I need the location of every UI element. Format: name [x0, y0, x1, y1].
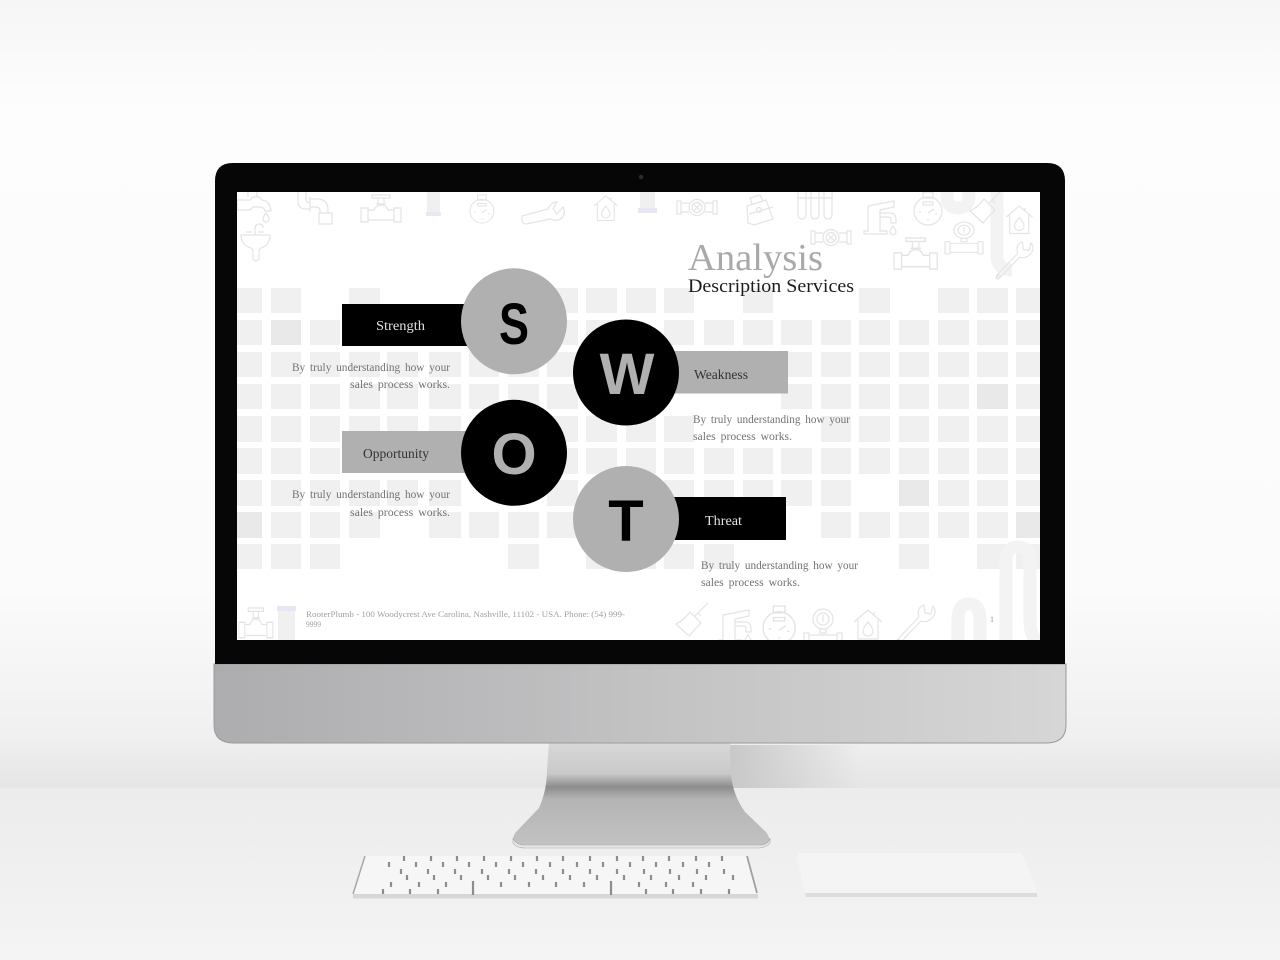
letter T: T	[608, 489, 644, 554]
background: table top	[0, 788, 1280, 960]
keyboard body	[353, 856, 758, 898]
monitor stand	[513, 743, 770, 848]
stand shadow on wall	[730, 745, 860, 788]
letter S: S	[499, 292, 529, 357]
page number: 1	[990, 615, 994, 624]
heading: Description Services: Description Services	[688, 276, 854, 297]
description: sales process works.	[350, 379, 450, 391]
icon: pale tube	[426, 192, 441, 216]
plumbing icons: top row	[237, 190, 1033, 279]
icon: pale tube with blue base	[638, 192, 657, 213]
icon: stopwatch	[470, 195, 494, 223]
description: By truly understanding how your	[693, 414, 850, 426]
monitor body	[214, 163, 1066, 743]
icon: toolbox	[747, 195, 773, 225]
description: sales process works.	[350, 507, 450, 519]
monitor bezel	[215, 163, 1065, 664]
description	[701, 560, 858, 589]
icon: house	[594, 196, 618, 220]
webcam	[639, 175, 643, 179]
icon: gauge, bottom	[804, 608, 842, 640]
title	[688, 244, 854, 296]
label: Strength	[376, 318, 425, 333]
footer address	[306, 610, 625, 629]
icon: pale tube, bottom left	[277, 606, 296, 640]
description: By truly understanding how your	[701, 560, 858, 572]
description	[292, 362, 450, 391]
circle T	[573, 466, 679, 572]
circle S	[461, 268, 567, 374]
label bar	[342, 304, 472, 346]
icon: house, right	[1006, 206, 1033, 234]
footer address: 9999	[306, 620, 321, 629]
icon: faucet	[864, 201, 896, 235]
icon: valve, large	[894, 238, 937, 269]
icon: gauge	[945, 222, 983, 254]
label bar	[668, 351, 788, 394]
heading: Analysis: Analysis	[688, 237, 823, 279]
circle O	[461, 400, 567, 506]
icon: valve, bottom left	[239, 608, 273, 638]
swot item: Threat	[573, 466, 858, 589]
icon: round valve, small	[811, 230, 851, 246]
description: sales process works.	[701, 577, 800, 589]
plumbing icons: bottom row	[238, 602, 936, 640]
label: Threat	[705, 513, 742, 528]
label bar	[342, 431, 472, 473]
description: sales process works.	[693, 431, 792, 443]
slide background	[237, 192, 1040, 640]
swot item: Weakness	[573, 320, 850, 443]
icon: house, bottom	[854, 610, 882, 639]
icon: round valve	[677, 200, 717, 216]
monitor chin	[214, 664, 1066, 743]
icon: test tubes	[797, 192, 833, 219]
keyboard	[353, 856, 758, 898]
icon: sink	[241, 224, 270, 261]
footer address: RooterPlumb - 100 Woodycrest Ave Carolina, Nashville, 11102 - USA. Phone: (54) 999-	[306, 610, 625, 619]
description: By truly understanding how your	[292, 362, 450, 374]
letter O: O	[491, 422, 537, 487]
label: Weakness	[694, 367, 748, 382]
icon: faucet, bottom	[719, 610, 751, 644]
icon: tap	[237, 192, 271, 222]
icon: valve	[361, 195, 401, 222]
circle W	[573, 320, 679, 426]
keyboard keys	[383, 856, 733, 895]
swot item: Strength	[292, 268, 567, 391]
description	[292, 489, 450, 519]
decorative pale pipes	[947, 192, 1040, 640]
icon: wrench, bottom	[896, 605, 935, 644]
icon: wrench	[522, 202, 564, 224]
icon: plunger, bottom	[676, 603, 708, 636]
label bar	[668, 497, 786, 540]
description	[693, 414, 850, 443]
icon: wrench, right	[996, 242, 1033, 279]
swot item: Opportunity	[292, 400, 567, 519]
icon: stopwatch, bottom	[763, 606, 795, 644]
icon: elbow pipe	[298, 192, 332, 224]
background tile grid	[237, 288, 1040, 569]
letter W: W	[600, 342, 655, 407]
screen slide	[237, 190, 1040, 648]
icon: plunger	[970, 190, 1002, 223]
icon: stopwatch, large	[914, 192, 942, 225]
label: Opportunity	[363, 446, 429, 461]
description: By truly understanding how your	[292, 489, 450, 501]
trackpad	[797, 853, 1037, 897]
